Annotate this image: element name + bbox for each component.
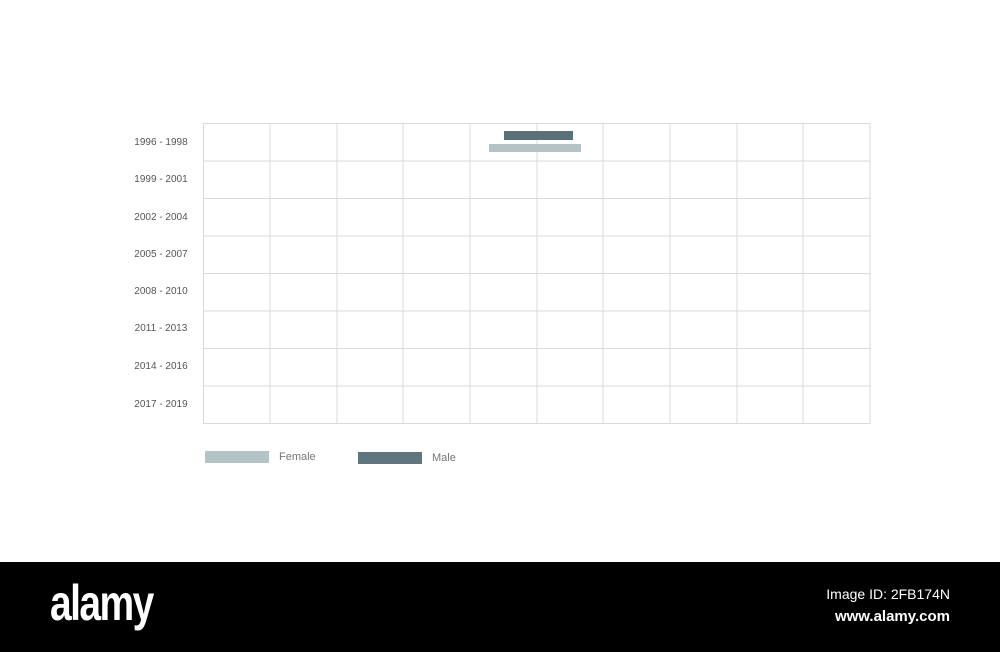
legend <box>205 451 456 464</box>
y-axis labels: 2011 - 2013 <box>135 323 187 334</box>
footer band <box>0 562 1000 652</box>
y-axis labels: 2002 - 2004 <box>134 212 188 223</box>
legend: female <box>205 451 316 463</box>
y-axis labels: 1996 - 1998 <box>134 137 188 148</box>
legend: female: Female <box>279 451 316 463</box>
y-axis labels <box>134 137 188 410</box>
y-axis labels: 2005 - 2007 <box>134 249 188 260</box>
chart <box>203 123 870 424</box>
y-axis labels: 2014 - 2016 <box>134 361 188 372</box>
bar: female 1996-1998 <box>489 144 581 152</box>
legend: male <box>358 452 456 464</box>
grid <box>203 123 870 424</box>
logo: alamy <box>50 575 153 631</box>
bar: male 1996-1998 <box>504 131 573 140</box>
url: www.alamy.com <box>835 608 950 625</box>
image id: Image ID: 2FB174N <box>826 586 950 602</box>
y-axis labels: 2008 - 2010 <box>134 286 188 297</box>
y-axis labels: 2017 - 2019 <box>134 399 188 410</box>
y-axis labels: 1999 - 2001 <box>134 174 188 185</box>
legend: male: Male <box>432 452 456 464</box>
